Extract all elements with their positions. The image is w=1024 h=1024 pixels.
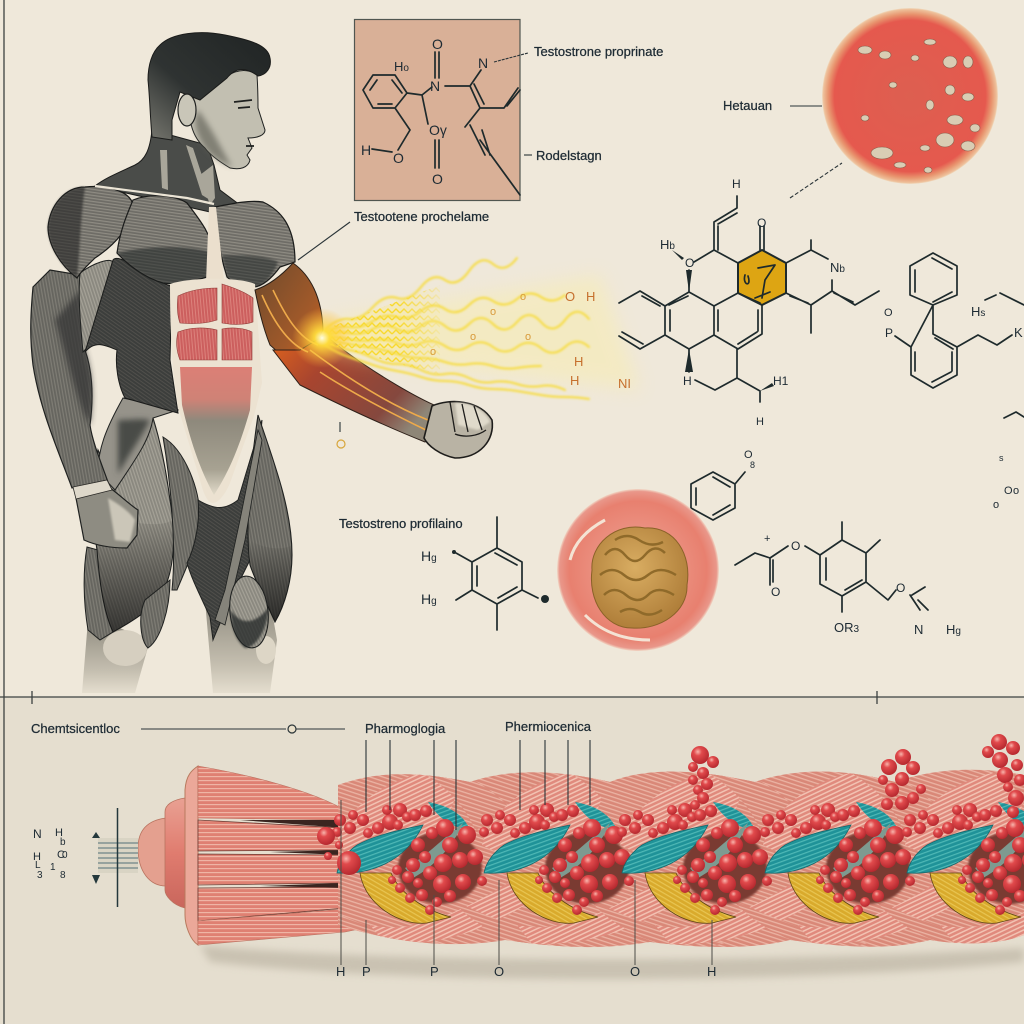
sternum [206, 207, 224, 282]
beam atoms: o [520, 291, 526, 303]
right lower molecule: N [914, 622, 923, 637]
right lower molecule: O [771, 585, 780, 599]
dark gaps [240, 820, 345, 888]
lower left leg [82, 620, 150, 693]
panel: molecule box: Ho [394, 59, 409, 74]
left bundle labels [33, 827, 68, 881]
beam atoms: o [525, 331, 531, 343]
right lower molecule: OR3 [834, 620, 860, 635]
panel: muscle fibre bundle [92, 734, 1024, 979]
beam atoms: o [470, 331, 476, 343]
beam atoms: H [574, 354, 583, 369]
second biphenyl molecule: K [1014, 325, 1023, 340]
panel: molecule box: O [432, 36, 443, 52]
left quadriceps shading [97, 510, 173, 632]
circle: tissue with brown mass [557, 489, 719, 651]
label: Chemtsicentloc with leader [31, 721, 345, 736]
left upper arm and forearm [31, 270, 108, 488]
lower atom labels [336, 964, 716, 979]
second biphenyl molecule: Hs [971, 304, 985, 319]
fist left [76, 488, 138, 548]
beam atoms: o [430, 346, 436, 358]
tiers [138, 818, 166, 886]
forearm tendons [262, 290, 428, 430]
panel: molecule box [354, 20, 520, 200]
label: Pharmoglogia: Pharmoglogia [365, 721, 446, 736]
cheek shadow [195, 110, 232, 167]
bonds [619, 196, 879, 402]
fist highlight [108, 498, 135, 542]
main steroid molecule: O [757, 216, 766, 230]
ground shadow [200, 945, 1024, 979]
lower atom labels: P [362, 964, 371, 979]
left bundle labels: H [55, 827, 63, 839]
hair [148, 33, 270, 140]
left knee [103, 630, 147, 666]
far-right fragments: s [999, 453, 1004, 463]
small striped bar [98, 838, 138, 873]
impact flash [292, 308, 352, 368]
left bundle labels: N [33, 827, 42, 841]
pale spots [858, 39, 980, 173]
hip [98, 398, 178, 490]
left bundle labels: C [57, 849, 65, 861]
panel: molecule box: O [432, 171, 443, 187]
entry berries [317, 827, 335, 845]
mass folds [600, 536, 676, 615]
braid strands [305, 768, 1024, 952]
fist highlight [455, 403, 490, 430]
main steroid molecule: H [732, 177, 741, 191]
small benzene: O [744, 449, 753, 461]
fist right [424, 402, 492, 458]
label: Chemtsicentloc with leader: Chemtsicentloc [31, 721, 120, 736]
molecule in box [363, 52, 520, 195]
braid overlays: teal, gold and berries [332, 802, 1024, 923]
vastus oval [226, 574, 272, 650]
panel: molecule box: O [393, 150, 404, 166]
pale crust [570, 520, 650, 640]
brown mass [591, 527, 688, 628]
right strap [215, 430, 262, 625]
conical fibre end [138, 766, 378, 945]
berry tower 3 [982, 734, 1024, 818]
small benzene: 8 [750, 460, 755, 470]
energy beam [292, 258, 640, 399]
beam atoms: H [570, 373, 579, 388]
right lower molecule: O [791, 539, 800, 553]
main steroid molecule: Nb [830, 260, 845, 275]
V abdomen panel [170, 279, 262, 503]
forearm shadow [55, 290, 92, 425]
lower atom labels: O [494, 964, 504, 979]
inner right thigh [187, 420, 262, 640]
label: Hetauan [723, 98, 822, 113]
beam atoms: O [565, 289, 575, 304]
left bundle labels: L [35, 860, 41, 871]
hip shadow [118, 419, 150, 475]
berry tower 2 [878, 749, 926, 810]
beam atoms: H [586, 289, 595, 304]
leader line to arm [298, 222, 350, 260]
main steroid molecule: H [683, 374, 692, 388]
wave lines [325, 258, 589, 399]
panel: molecule box: H [361, 142, 371, 158]
second biphenyl molecule: O [884, 307, 893, 319]
panel: molecule box: Oγ [429, 122, 447, 138]
left molecule [421, 517, 549, 630]
adductors [163, 437, 200, 590]
pectoral right [215, 201, 295, 287]
right knee [256, 636, 276, 664]
far-right fragments: o [1013, 485, 1019, 497]
left bundle labels: b [60, 837, 66, 848]
deltoid shading [48, 187, 85, 278]
ear [178, 94, 196, 126]
upper leader lines [366, 740, 590, 830]
lower atom labels: H [336, 964, 345, 979]
outer right quadriceps [248, 415, 292, 622]
label: Testostrone proprinate [494, 44, 663, 62]
forearm [273, 335, 438, 442]
left molecule: Hg [421, 591, 437, 607]
main steroid molecule [619, 177, 879, 428]
glow haze [325, 275, 640, 390]
right lower molecule: + [764, 533, 770, 545]
left bundle labels: 1 [50, 862, 56, 873]
axis and arrowheads [116, 808, 118, 907]
face [190, 71, 265, 169]
outer left thigh [84, 547, 113, 640]
left bundle labels: 0 [62, 850, 68, 861]
circle: red tissue [822, 8, 998, 184]
second biphenyl molecule [884, 253, 1024, 388]
abs [177, 284, 253, 360]
beam atoms [430, 289, 631, 391]
label: Testostrone proprinate: Testostrone proprinate [534, 44, 663, 59]
main steroid molecule: O [685, 256, 694, 270]
label: Testootene prochelame: Testootene prochelame [354, 209, 489, 224]
lower abdomen fade [180, 367, 252, 495]
left quadriceps [94, 418, 173, 632]
label: Hetauan: Hetauan [723, 98, 772, 113]
far-right fragments: O [1004, 485, 1013, 497]
lower panel background [0, 697, 1024, 1024]
pectoral left shading [117, 247, 213, 284]
fibre bars [198, 766, 345, 820]
label: Phermiocenica: Phermiocenica [505, 719, 592, 734]
ring markings [744, 265, 775, 298]
highlighted ring [738, 250, 786, 305]
beam atoms: NI [618, 376, 631, 391]
label: Rodelstagn: Rodelstagn [536, 148, 602, 163]
small vastus [141, 580, 170, 648]
left molecule: Hg [421, 548, 437, 564]
label: Testostreno profilaino: Testostreno profilaino [339, 516, 463, 531]
braid base [338, 770, 1024, 947]
outer right shading [250, 540, 292, 622]
main steroid molecule: H1 [773, 374, 789, 388]
chest highlight [95, 186, 214, 204]
left bundle labels: 3 [37, 870, 43, 881]
sparks mesh [328, 285, 440, 375]
wedges [672, 250, 774, 391]
right lower molecule [735, 522, 961, 637]
second biphenyl molecule: P [885, 326, 893, 340]
lower leader lines [341, 800, 712, 965]
panel: molecule box: N [478, 55, 488, 71]
triceps [79, 260, 113, 352]
main steroid molecule: H [756, 416, 764, 428]
main steroid molecule: Hb [660, 237, 675, 252]
left bundle labels: 8 [60, 870, 66, 881]
beam atoms: o [490, 306, 496, 318]
right lower molecule: Hg [946, 622, 961, 637]
panel: molecule box: N [430, 78, 440, 94]
pectoral right shading [222, 255, 278, 287]
lower atom labels: O [630, 964, 640, 979]
right lower molecule: O [896, 581, 905, 595]
lower atom labels: H [707, 964, 716, 979]
pectoral left [117, 196, 213, 284]
neck tendons [160, 145, 215, 205]
oblique [85, 258, 178, 413]
wrist band [73, 480, 112, 499]
small benzene [691, 449, 755, 520]
berry tower 1 [688, 746, 719, 817]
trapezius and neck [95, 130, 240, 212]
upper right arm [255, 263, 323, 372]
deltoid [48, 187, 133, 278]
lower right leg [205, 600, 277, 693]
fingers [450, 402, 486, 436]
vastus shading [231, 608, 268, 648]
dashed pointer [790, 163, 842, 198]
head [148, 33, 270, 169]
far-right fragments: o [993, 499, 999, 511]
small marker below arm [337, 422, 345, 448]
brow and eye [234, 100, 254, 146]
left bundle labels: H [33, 851, 41, 863]
far-right fragments [993, 412, 1024, 511]
muscular figure [31, 33, 492, 693]
lower atom labels: P [430, 964, 439, 979]
